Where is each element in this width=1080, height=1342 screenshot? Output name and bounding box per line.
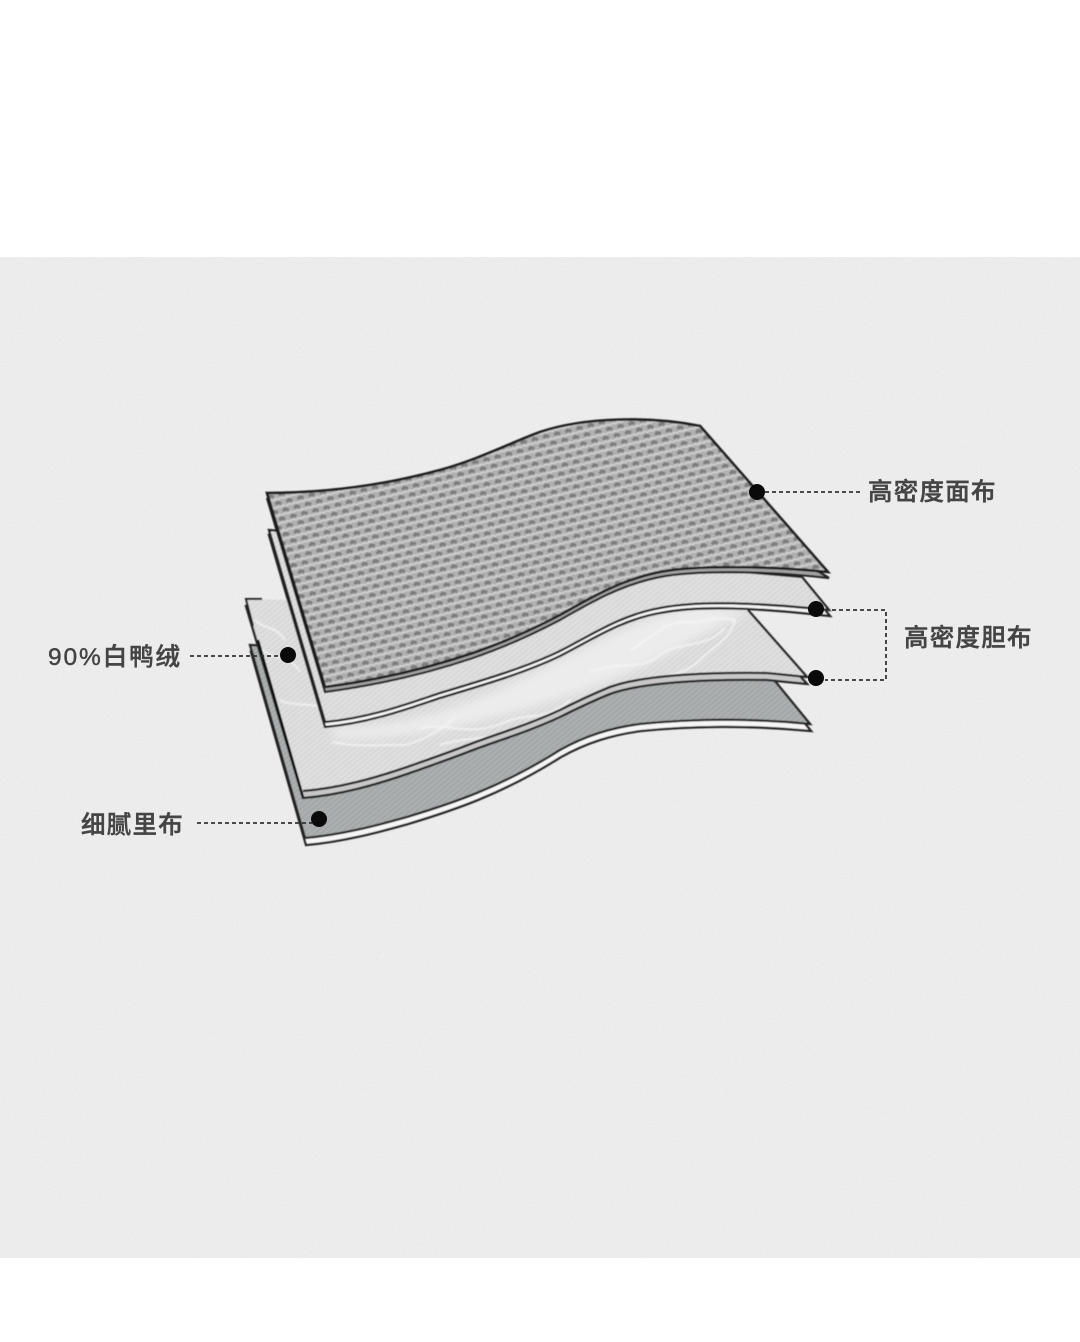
- layer: lining fabric sheet: [250, 645, 811, 845]
- label: outer fabric: 高密度面布: [868, 478, 997, 506]
- layer: high-density inner fabric sheet: [269, 530, 830, 727]
- panel: grey textured background: [0, 257, 1080, 1258]
- label: duck down: 90%白鸭绒: [48, 643, 182, 671]
- leader: outer fabric: [749, 484, 860, 500]
- down feather swirl pattern: [255, 605, 752, 745]
- leader: duck down: [190, 647, 296, 663]
- leader: inner fabric bracket: [808, 601, 886, 686]
- label: inner fabric: 高密度胆布: [904, 624, 1033, 652]
- illustration: stacked fabric layers: [246, 419, 830, 845]
- leader: lining: [197, 811, 327, 827]
- layer: high-density outer fabric sheet: [267, 419, 829, 692]
- label: lining: 细腻里布: [81, 811, 184, 839]
- layer: 90% white duck down sheet: [246, 599, 807, 798]
